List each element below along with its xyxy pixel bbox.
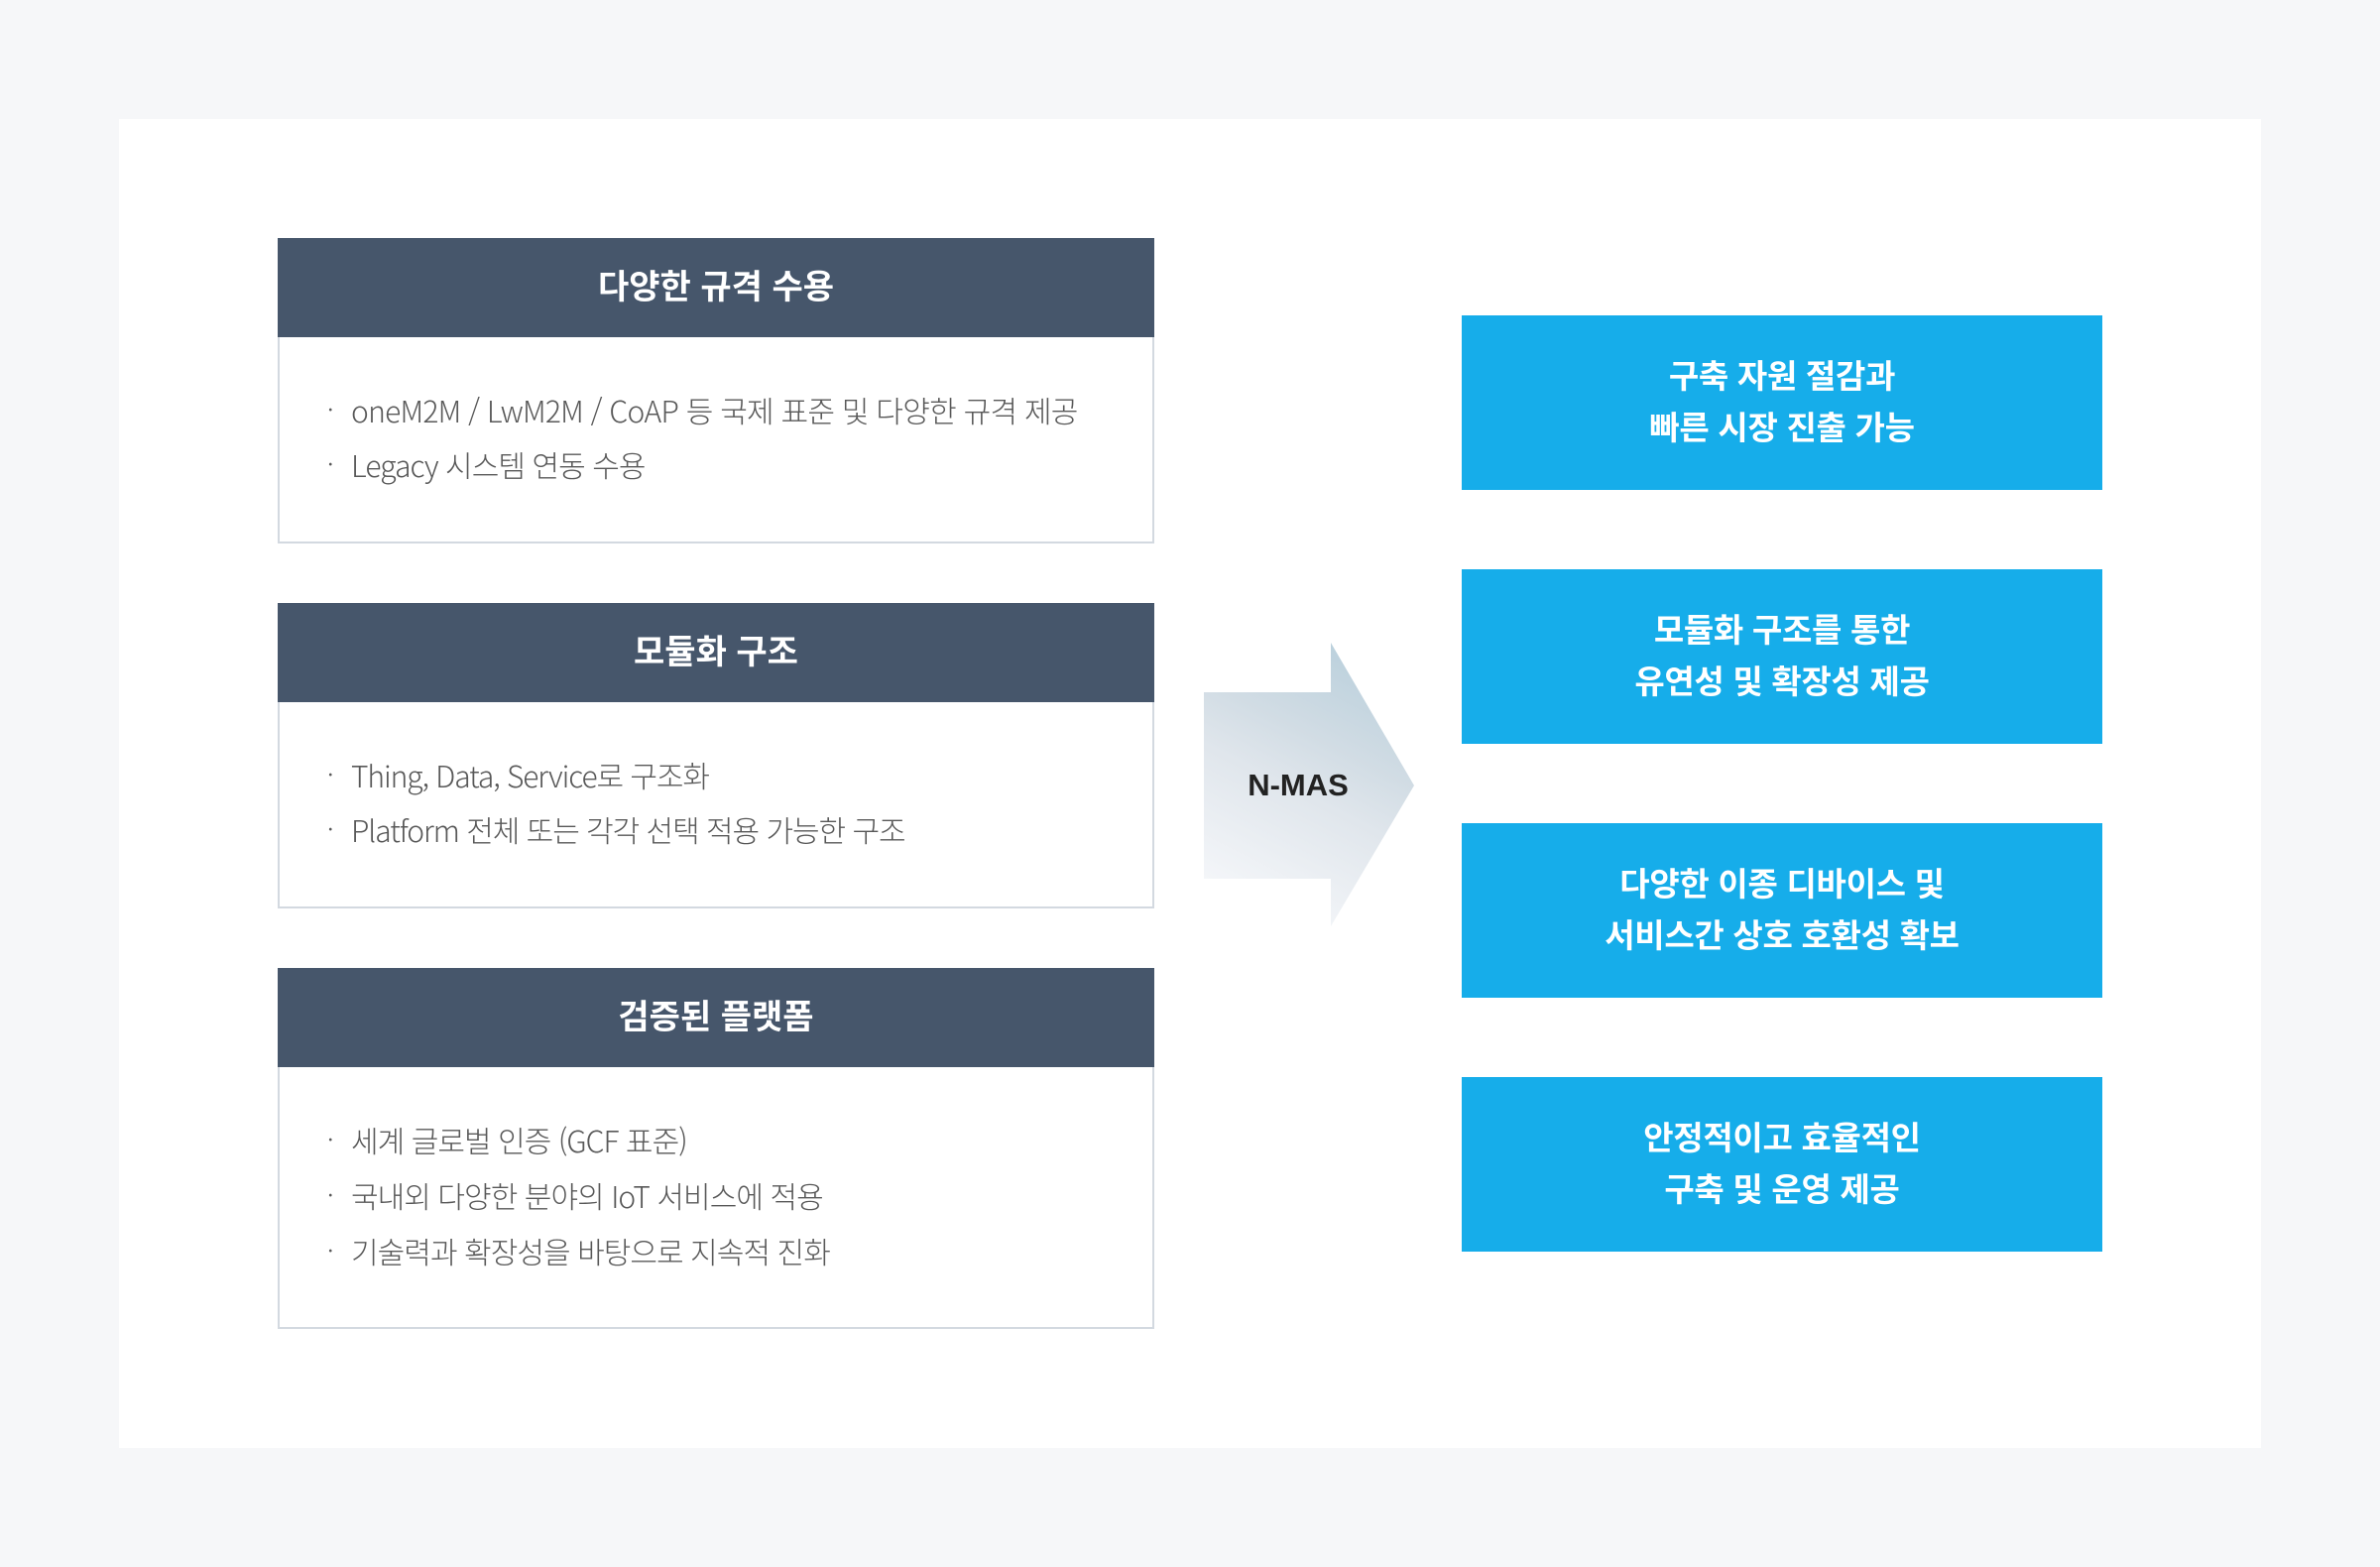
white background panel (119, 119, 2261, 1448)
panel: 모듈화 구조: · (327, 756, 332, 791)
heading: 다양한 규격 수용 (278, 238, 1154, 337)
benefit box 4: 안정적이고 효율적인 (1643, 1112, 1921, 1159)
bullet: domestic and overseas IoT: 국내외 다양한 분야의 IoT 서비스에 적용 (351, 1172, 823, 1216)
benefit box 2: 유연성 및 확장성 제공 (1634, 656, 1930, 703)
panel: 검증된 플랫폼 (278, 968, 1154, 1329)
benefit box 2: 모듈화 구조를 통한 (1654, 604, 1910, 652)
arrow: N-MAS (1204, 643, 1414, 926)
benefit box 3: 다양한 이종 디바이스 및 (1619, 858, 1945, 905)
bullet: thing data service: Thing, Data, Service로 구조화 (351, 752, 709, 795)
heading: 모듈화 구조 (278, 603, 1154, 702)
heading: 검증된 플랫폼 (278, 968, 1154, 1067)
benefit box 3: 서비스간 상호 호환성 확보 (1605, 909, 1960, 957)
benefit box 2 (1462, 569, 2102, 744)
benefit box 1 (1462, 315, 2102, 490)
panel: 검증된 플랫폼: · (327, 1232, 333, 1267)
bullet: continuous evolution: 기술력과 확장성을 바탕으로 지속적 진화 (351, 1228, 830, 1271)
heading: 검증된 플랫폼: 검증된 플랫폼 (618, 990, 814, 1038)
benefit box 4 (1462, 1077, 2102, 1252)
bullet: global certification: 세계 글로벌 인증 (GCF 표준) (351, 1117, 687, 1160)
heading: 다양한 규격 수용: 다양한 규격 수용 (598, 260, 834, 308)
panel: 검증된 플랫폼: · (327, 1121, 333, 1156)
panel: 모듈화 구조: · (327, 809, 332, 847)
bullet: platform: Platform 전체 또는 각각 선택 적용 가능한 구조 (351, 807, 905, 851)
benefit box 3 (1462, 823, 2102, 998)
bullet: standards: oneM2M / LwM2M / CoAP 등 국제 표준 및 다양한 규격 제공 (351, 387, 1078, 430)
benefit box 1: 구축 자원 절감과 (1669, 350, 1895, 398)
panel: 다양한 규격 수용 (278, 238, 1154, 543)
benefit box 4: 구축 및 운영 제공 (1664, 1163, 1900, 1211)
bullet: legacy: Legacy 시스템 연동 수용 (351, 442, 645, 486)
arrow: N-MAS: N-MAS (1248, 768, 1349, 802)
benefit box 1: 빠른 시장 진출 가능 (1649, 402, 1915, 449)
heading: 모듈화 구조: 모듈화 구조 (634, 625, 798, 673)
panel: 검증된 플랫폼: · (327, 1176, 333, 1212)
panel: 모듈화 구조 (278, 603, 1154, 908)
panel: 다양한 규격 수용: · (327, 391, 333, 426)
panel: 다양한 규격 수용: · (327, 444, 333, 482)
